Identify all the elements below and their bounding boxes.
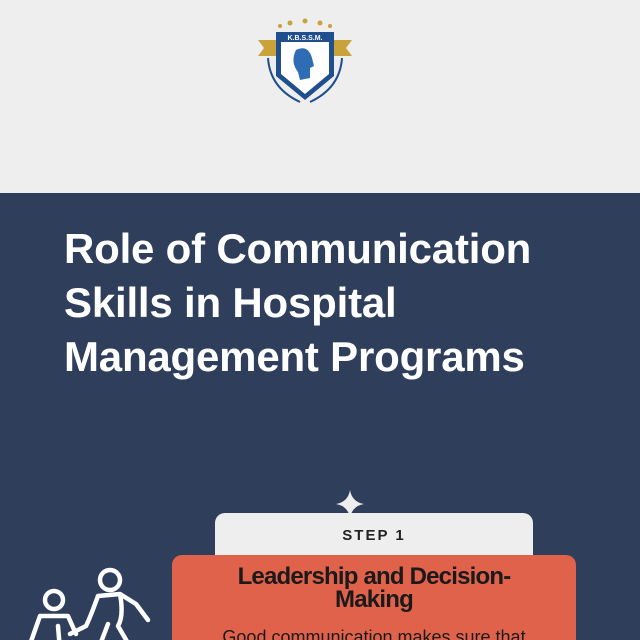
logo: K.B.S.S.M.: [287, 35, 323, 42]
step card: STEP 1: [342, 527, 406, 544]
step card: [215, 513, 533, 573]
icon: people helping: [29, 568, 150, 640]
step content panel: Making: [335, 586, 413, 613]
header band: [0, 0, 640, 193]
title: Skills in Hospital: [64, 279, 396, 326]
icon: sparkle: [336, 490, 364, 513]
step content panel: Leadership and Decision-: [238, 563, 510, 590]
title: Management Programs: [64, 333, 525, 380]
step content panel: [172, 555, 576, 640]
logo: [258, 18, 352, 103]
title: Role of Communication: [64, 225, 531, 272]
title: [64, 225, 531, 380]
